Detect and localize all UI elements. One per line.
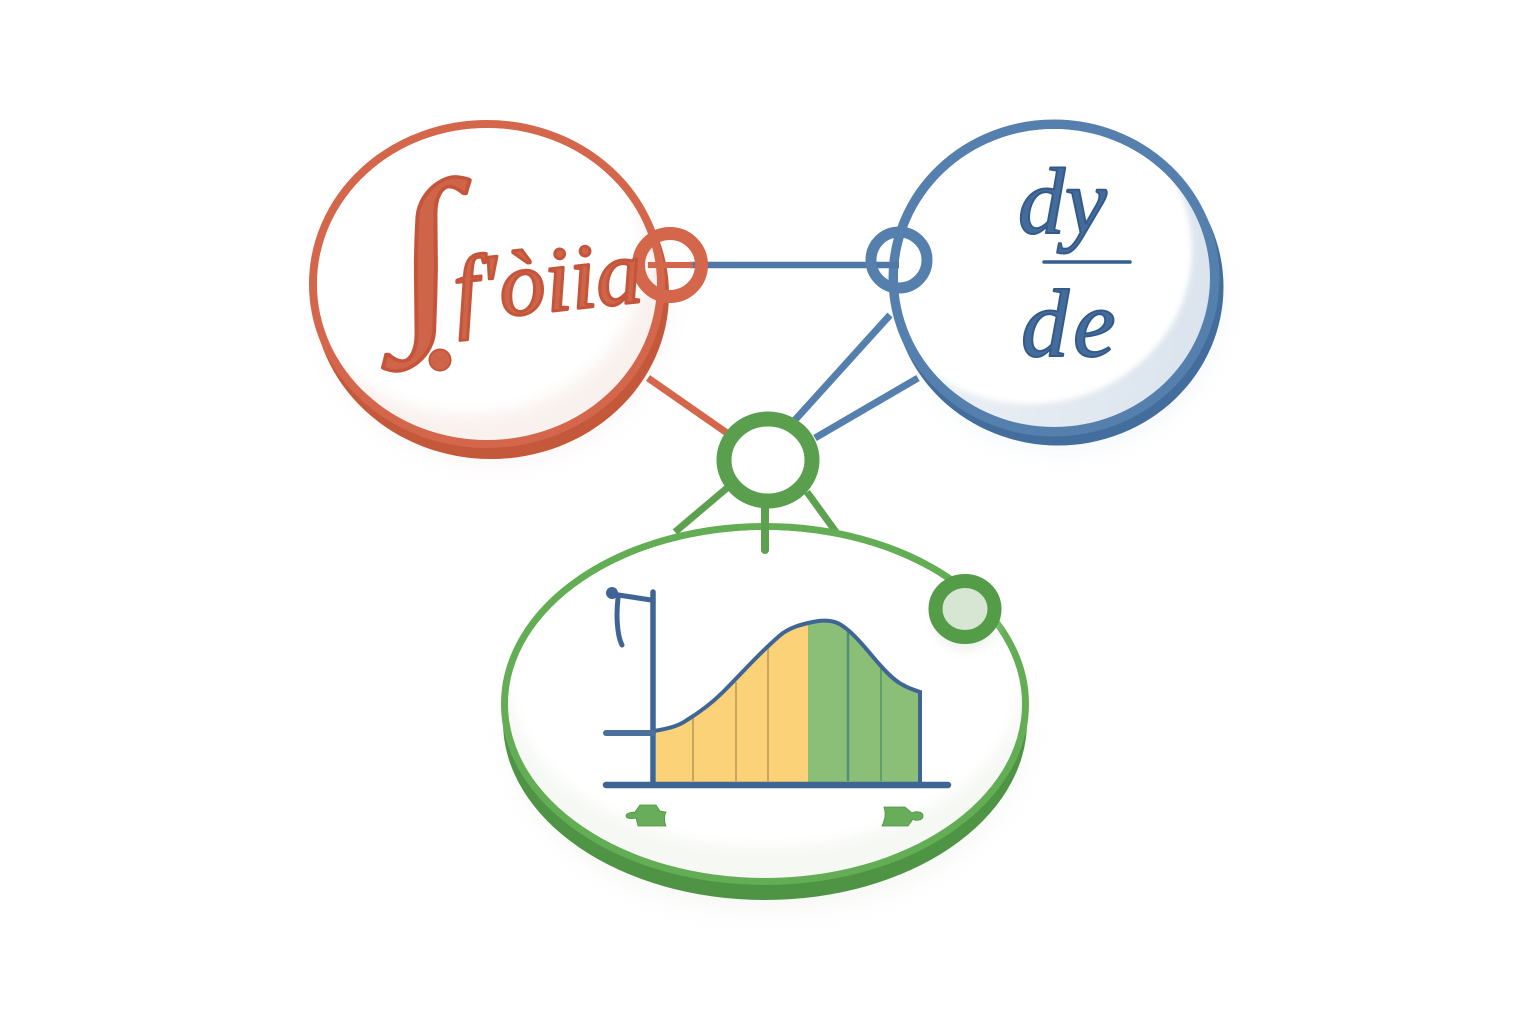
connector: hub to graph right [807,492,836,532]
connector: derivative circle to hub, upper [795,315,890,420]
y axis [650,592,656,785]
node: green small ring [936,581,996,648]
axis flag glyph [612,594,651,645]
node: blue connector ring [871,232,927,288]
denominator de: de [1021,270,1120,377]
integrand text: f'òiia [448,220,646,341]
node: red connector ring [638,234,702,296]
x axis [606,782,948,788]
chart: area under curve [606,587,948,785]
yellow area [656,623,808,782]
dividers [693,630,881,781]
panel: integral circle [309,120,669,459]
connector: hub to graph left [675,488,727,532]
integral sign: ∫ [382,143,470,371]
connector: red ring to blue ring [648,262,899,268]
green area [808,621,920,782]
connector: integral circle to hub [648,378,727,433]
formula: derivative fraction [1018,150,1130,377]
panel: graph ellipse [503,504,1027,913]
baseline stub [606,730,653,736]
numerator dy: dy [1018,150,1107,254]
node: green hub ring [724,419,812,501]
formula: integral expression [382,143,646,371]
connector: hub stem into graph [761,500,769,550]
marker: left tick label [626,805,666,826]
integral dot [430,350,450,370]
panel: derivative circle [888,120,1224,446]
fraction bar [1044,260,1130,264]
connector: derivative circle to hub, lower [815,378,918,438]
curve [654,621,920,785]
marker: right tick label [882,807,923,826]
